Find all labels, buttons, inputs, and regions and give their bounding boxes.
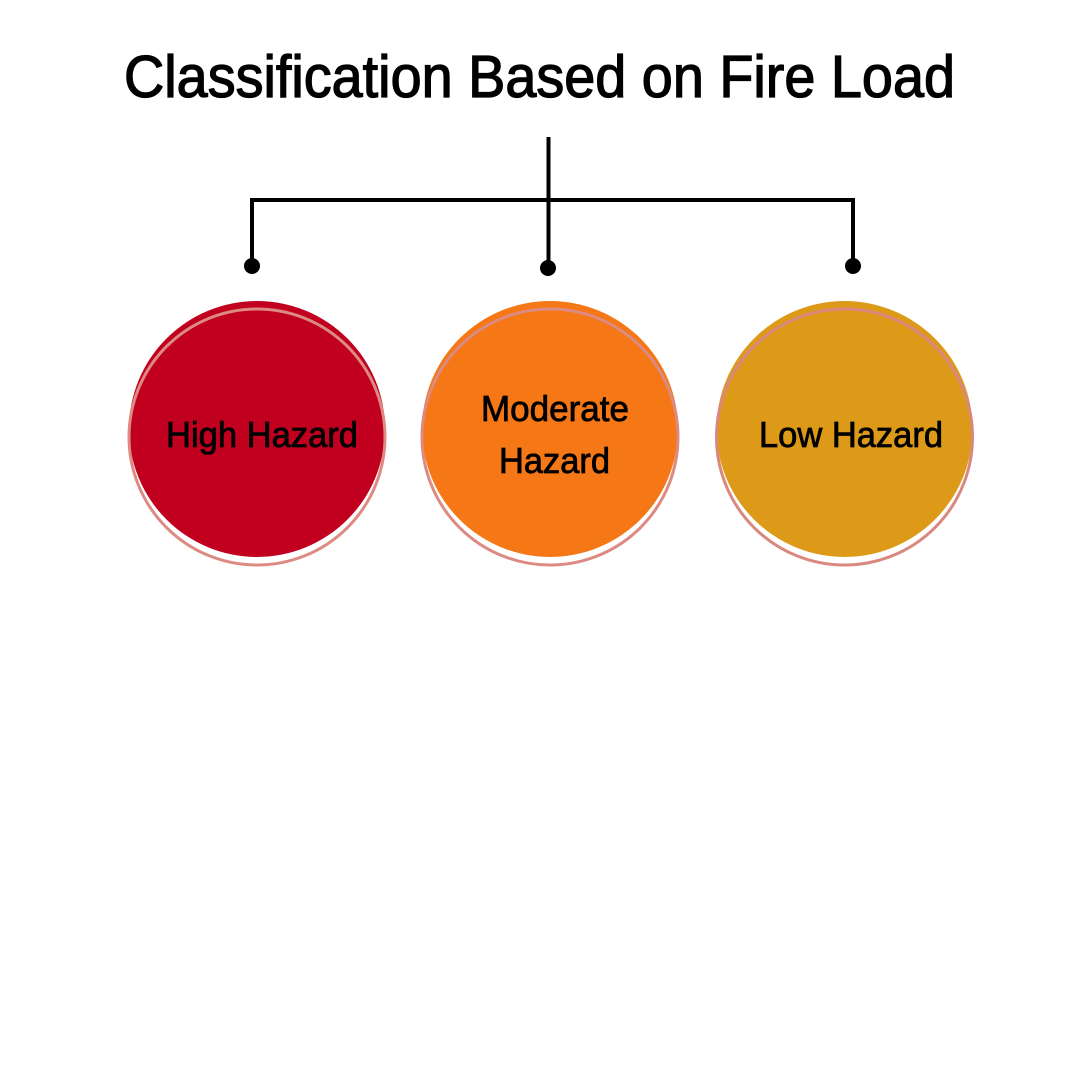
label: Moderate Hazard: Moderate bbox=[481, 388, 629, 429]
connector: left drop bbox=[250, 198, 254, 266]
label: Moderate Hazard: Hazard bbox=[499, 440, 610, 481]
connector: horizontal bar bbox=[250, 198, 855, 202]
dot: right bbox=[845, 258, 861, 274]
title: Classification Based on Fire Load bbox=[124, 44, 955, 110]
label: Low Hazard: Low Hazard bbox=[759, 414, 943, 455]
connector: right drop bbox=[851, 198, 855, 266]
circle: Low Hazard bbox=[716, 301, 972, 565]
dot: left bbox=[244, 258, 260, 274]
circle: Moderate Hazard bbox=[422, 301, 678, 565]
dot: middle bbox=[540, 260, 556, 276]
circle: High Hazard bbox=[129, 301, 385, 565]
connector: main stem bbox=[546, 137, 550, 268]
label: High Hazard: High Hazard bbox=[166, 414, 358, 455]
connector: tree lines and dots bbox=[244, 137, 861, 276]
